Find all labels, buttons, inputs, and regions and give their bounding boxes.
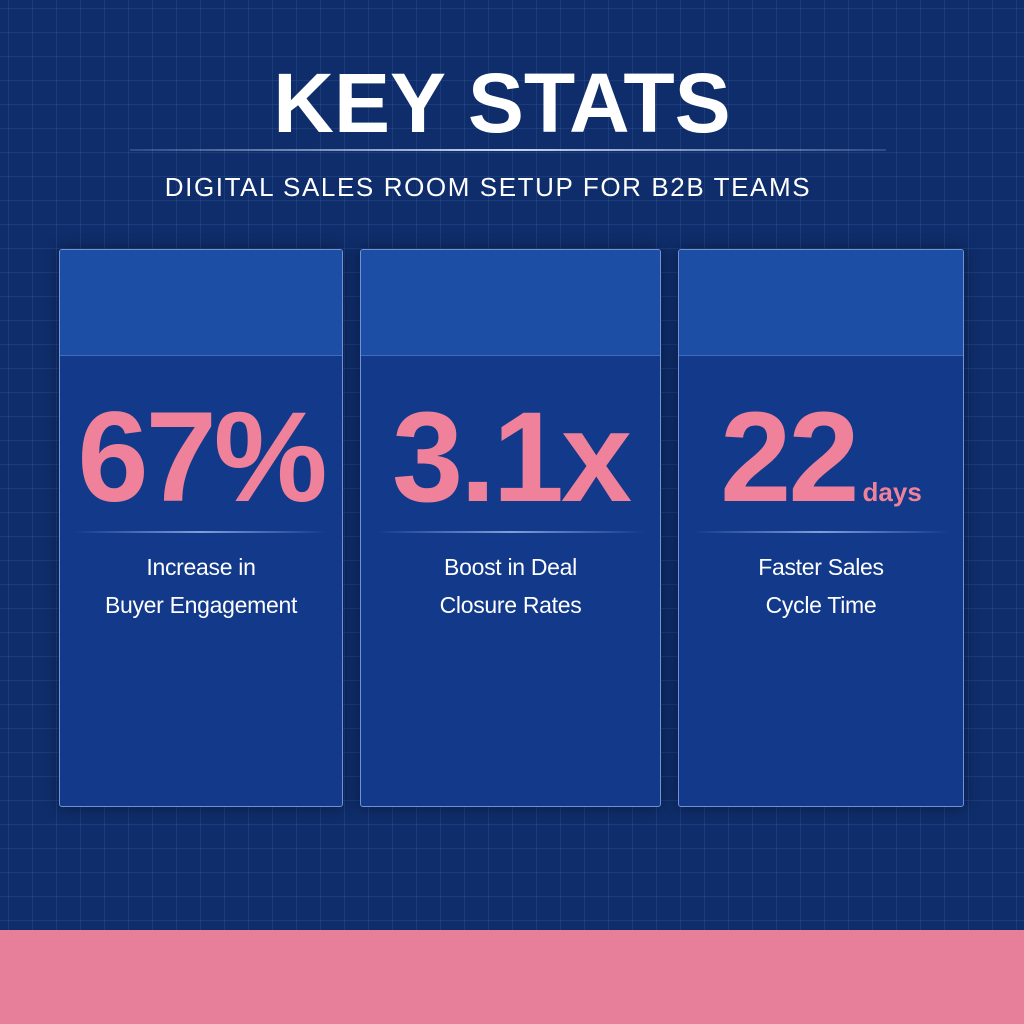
label — [758, 554, 884, 618]
label: Buyer Engagement — [105, 592, 297, 618]
label: Faster Sales — [758, 554, 884, 580]
label — [105, 554, 298, 618]
label: Cycle Time — [766, 592, 876, 618]
stat number: 3.1x — [392, 386, 629, 529]
label: Closure Rates — [440, 592, 581, 618]
panel: engagement — [59, 249, 343, 807]
stat number: 67% — [77, 386, 325, 529]
panel: closure — [360, 249, 661, 807]
footer bar — [0, 930, 1024, 1024]
title: KEY STATS — [273, 56, 731, 150]
label — [440, 554, 581, 618]
subtitle: DIGITAL SALES ROOM SETUP FOR B2B TEAMS — [165, 172, 811, 202]
label: Boost in Deal — [444, 554, 577, 580]
stat number: 22days — [720, 386, 922, 529]
label: Increase in — [146, 554, 256, 580]
panel: cycle time — [678, 249, 964, 807]
